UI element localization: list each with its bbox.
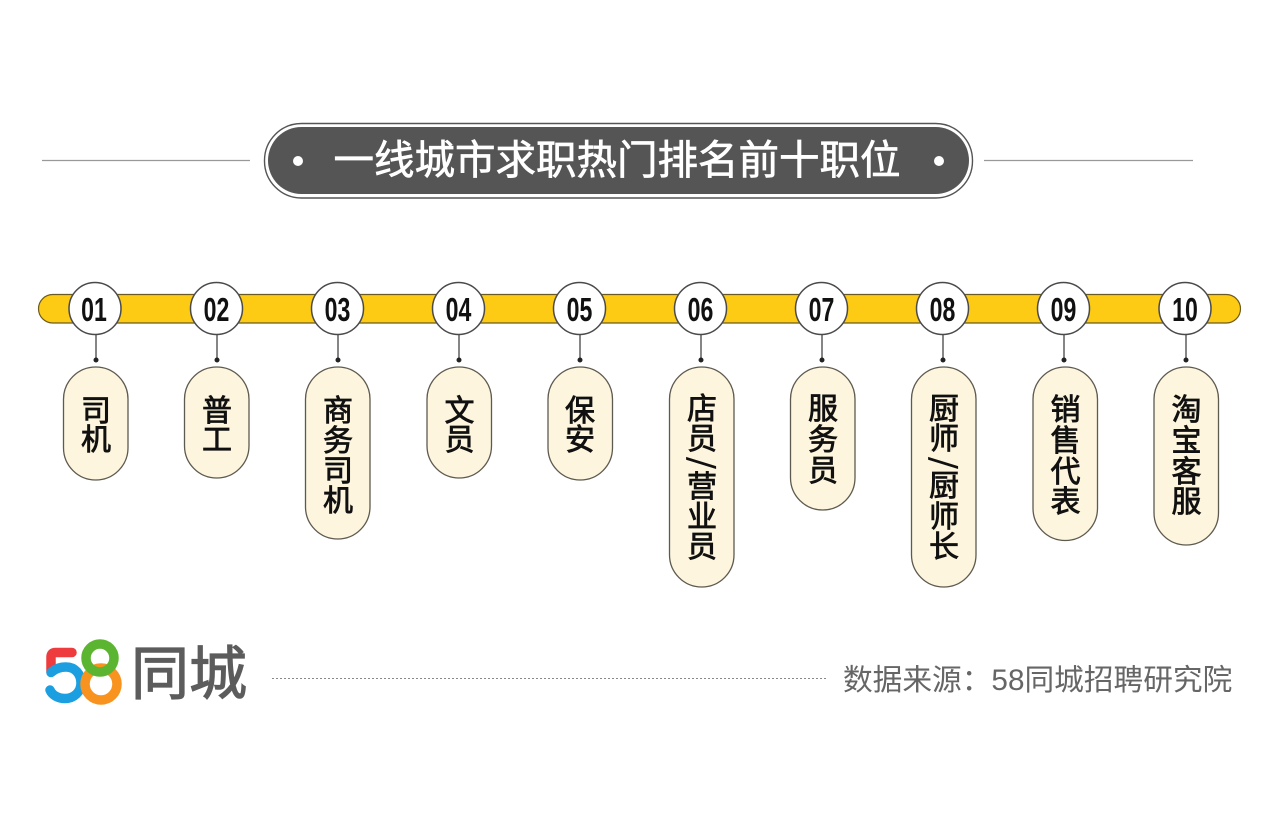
item 06: 06 xyxy=(688,292,713,329)
item 08: / xyxy=(925,457,969,469)
item 06: / xyxy=(683,457,727,469)
item 07: 07 xyxy=(809,292,834,329)
item 07: 务 xyxy=(808,415,838,459)
item 09: 代 xyxy=(1050,447,1080,491)
item 09: 表 xyxy=(1050,477,1080,521)
item 03: 务 xyxy=(323,416,353,460)
item 08: 厨 xyxy=(929,384,959,428)
item 03 xyxy=(306,282,370,539)
item 10: 10 xyxy=(1172,292,1198,329)
logo: 58同城: 同城 xyxy=(131,642,247,707)
item 03: 司 xyxy=(323,446,353,490)
item 04: 文 xyxy=(444,386,474,430)
item 08: 长 xyxy=(929,522,959,566)
item 05: 05 xyxy=(567,292,592,329)
item 05: 保 xyxy=(565,386,595,430)
item 04: 员 xyxy=(444,415,474,459)
item 04 xyxy=(427,282,492,478)
item 07 xyxy=(790,282,855,510)
timeline bar xyxy=(38,294,1240,323)
item 08: 师 xyxy=(929,492,959,536)
item 06: 营 xyxy=(687,462,717,506)
title: 一线城市求职热门排名前十职位 xyxy=(334,137,900,183)
item 06: 员 xyxy=(687,522,717,566)
item 10 xyxy=(1154,282,1218,545)
item 02: 工 xyxy=(202,415,232,459)
item 09 xyxy=(1033,282,1098,540)
item 01: 司 xyxy=(81,386,111,430)
title xyxy=(264,124,972,198)
item 08 xyxy=(912,282,976,587)
item 06: 员 xyxy=(687,414,717,458)
item 05 xyxy=(548,282,612,480)
item 01: 01 xyxy=(81,292,107,329)
logo: 58同城 xyxy=(50,642,247,707)
item 10: 服 xyxy=(1172,477,1202,521)
item 04: 04 xyxy=(446,292,471,329)
item 01 xyxy=(64,282,128,480)
item 09: 销 xyxy=(1050,385,1080,429)
item 03: 机 xyxy=(323,476,353,520)
item 08: 师 xyxy=(929,414,959,458)
item 03: 商 xyxy=(323,386,353,430)
item 07: 服 xyxy=(808,384,838,428)
item 06: 店 xyxy=(687,384,717,428)
dotted divider xyxy=(272,678,828,680)
item 06: 业 xyxy=(687,492,717,536)
item 03: 03 xyxy=(325,292,350,329)
item 01: 机 xyxy=(81,415,111,459)
item 05: 安 xyxy=(565,415,595,459)
item 02: 02 xyxy=(204,292,229,329)
item 02 xyxy=(184,282,249,478)
item 06 xyxy=(670,282,734,587)
item 08: 厨 xyxy=(929,461,959,505)
source note: 数据来源：58同城招聘研究院 xyxy=(843,664,1232,697)
item 09: 09 xyxy=(1051,292,1076,329)
item 10: 淘 xyxy=(1172,385,1202,429)
item 08: 08 xyxy=(930,292,955,329)
item 09: 售 xyxy=(1050,416,1080,460)
item 07: 员 xyxy=(808,446,838,490)
item 10: 客 xyxy=(1172,447,1202,491)
item 02: 普 xyxy=(202,386,232,430)
item 10: 宝 xyxy=(1172,416,1202,460)
